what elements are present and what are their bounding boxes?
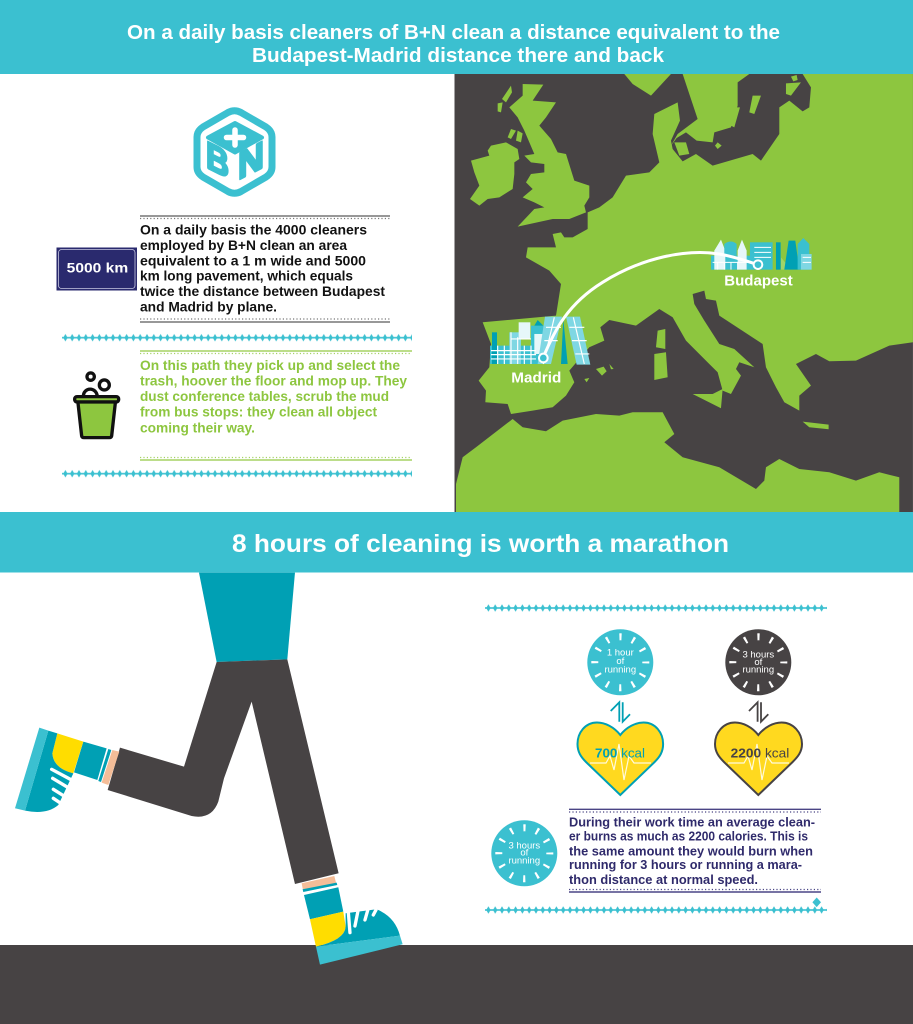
clock: 1 hour of running: running	[604, 664, 636, 675]
text block: what they clean	[140, 351, 412, 460]
heart: 2200 kcal	[715, 722, 802, 795]
heart: 700 kcal	[578, 722, 663, 795]
Madrid skyline	[490, 317, 590, 365]
rear foot	[15, 728, 119, 812]
clock: 3 hours of running teal: of	[520, 848, 529, 859]
text block: calories burned: the same amount they would burn when	[569, 844, 813, 859]
ground strip	[0, 945, 913, 1024]
clock: 3 hours of running teal: running	[508, 855, 540, 866]
text block: what they clean: trash, hoover the floor and mop up. They	[140, 374, 407, 389]
clock: 3 hours of running dark: of	[754, 657, 763, 668]
text block: what they clean: dust conference tables, scrub the mud	[140, 389, 389, 404]
text block: daily area: and Madrid by plane.	[140, 300, 277, 315]
heart: 700 kcal: 700 kcal	[595, 746, 645, 761]
runner illustration	[15, 573, 403, 965]
text block: what they clean: from bus stops: they clean all object	[140, 405, 377, 420]
label: Madrid: Madrid	[511, 369, 561, 386]
text block: daily area: On a daily basis the 4000 cleaners	[140, 222, 367, 237]
text block: daily area: employed by B+N clean an area	[140, 238, 347, 253]
road sign: 5000 km: 5000 km	[67, 259, 128, 275]
text block: daily area: equivalent to a 1 m wide and 5000	[140, 254, 366, 269]
map: Europe with Madrid to Budapest route	[455, 74, 913, 512]
header band: top title: Budapest-Madrid distance there and back	[252, 45, 665, 67]
label: Budapest: Budapest	[724, 273, 793, 290]
heart: 2200 kcal: 2200 kcal	[731, 746, 789, 761]
logo: B+N hexagon: N	[238, 132, 264, 188]
header band: top title	[0, 0, 913, 74]
Budapest skyline	[711, 238, 812, 270]
road sign: 5000 km	[56, 248, 137, 290]
arrow: teal exchange	[611, 702, 630, 722]
clock: 3 hours of running dark: running	[742, 665, 774, 676]
text block: daily area: twice the distance between Budapest	[140, 284, 385, 299]
clock: 1 hour of running: 1 hour	[607, 648, 634, 659]
clock: 1 hour of running: of	[616, 656, 625, 667]
text block: calories burned: er burns as much as 2200 calories. This is	[569, 829, 808, 844]
header band: marathon title: 8 hours of cleaning is worth a marathon	[232, 530, 729, 558]
header band: top title: On a daily basis cleaners of B+N clean a distance equivalent to the	[127, 22, 780, 44]
text block: calories burned: thon distance at normal speed.	[569, 872, 758, 887]
clock: 3 hours of running dark	[725, 629, 791, 695]
icon: bucket with bubbles	[75, 373, 119, 438]
logo: B+N hexagon	[197, 111, 272, 193]
text block: what they clean: On this path they pick up and select the	[140, 358, 400, 373]
text block: calories burned: During their work time an average clean-	[569, 815, 815, 830]
logo: B+N hexagon: B	[206, 132, 229, 187]
clock: 3 hours of running dark: 3 hours	[742, 650, 774, 661]
flight route arc	[539, 253, 762, 362]
clock: 1 hour of running	[587, 629, 653, 695]
text block: daily area	[140, 216, 390, 322]
front foot	[302, 876, 403, 965]
text block: what they clean: coming their way.	[140, 420, 255, 435]
clock: 3 hours of running teal	[491, 820, 557, 886]
clock: 3 hours of running teal: 3 hours	[508, 840, 540, 851]
text block: daily area: km long pavement, which equals	[140, 268, 353, 283]
text block: calories burned	[569, 809, 821, 892]
text block: calories burned: running for 3 hours or running a mara-	[569, 857, 802, 872]
arrow: grey exchange	[749, 702, 768, 722]
header band: marathon title	[0, 512, 913, 572]
